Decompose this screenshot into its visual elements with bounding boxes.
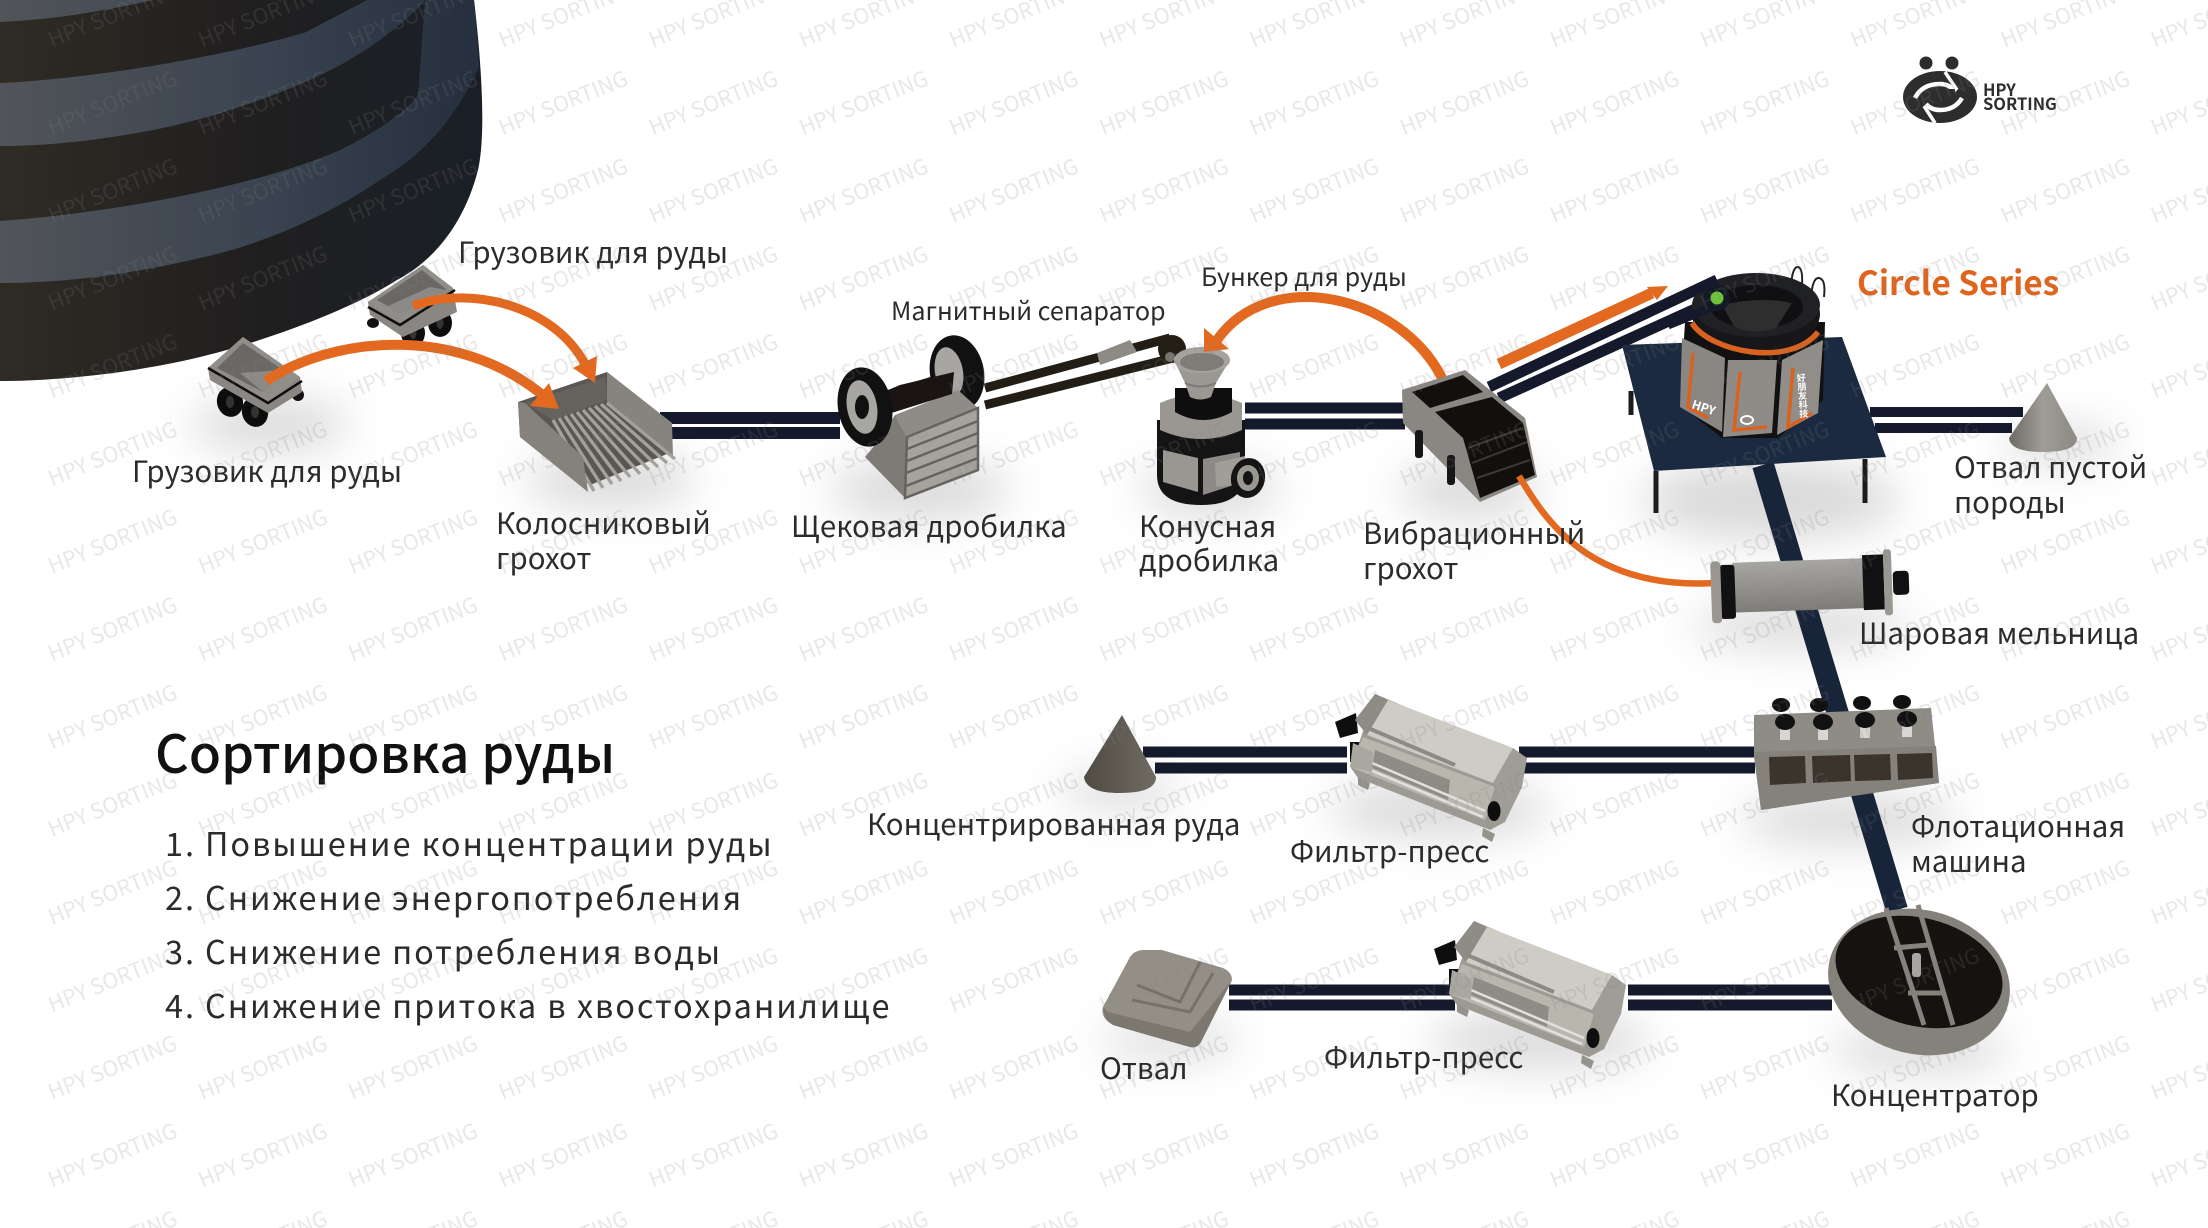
- Circle Series sorter: [1660, 267, 1825, 438]
- waste rock cone: [2009, 383, 2077, 452]
- benefits list: 2. Снижение энергопотребления: [165, 873, 743, 920]
- benefits list: [165, 819, 891, 1028]
- grizzly screen: [518, 372, 675, 492]
- arrow: feed to Circle Series: [1499, 286, 1668, 364]
- label: thickener: Концентратор: [1831, 1073, 2039, 1115]
- benefits list: 4. Снижение притока в хвостохранилище: [165, 981, 891, 1028]
- truck upper: [367, 265, 457, 347]
- label: vibrating screen: Вибрационный: [1363, 511, 1585, 553]
- cone crusher: [1157, 347, 1269, 505]
- Circle Series sorter: 科: [1798, 398, 1808, 411]
- logo: HPY: [1983, 77, 2016, 101]
- ball mill: [1710, 549, 1910, 623]
- label: grizzly screen: Колосниковый: [496, 501, 711, 543]
- conveyors: [660, 280, 2023, 1005]
- tailings pile: [1102, 950, 1232, 1047]
- label: truck lower: Грузовик для руды: [132, 449, 402, 491]
- benefits list: 3. Снижение потребления воды: [165, 927, 722, 974]
- Circle Series sorter: 友: [1798, 389, 1807, 402]
- vibrating screen: [1402, 370, 1537, 502]
- platform: [1622, 337, 1886, 513]
- label: ore bunker: Бункер для руды: [1201, 258, 1407, 294]
- label: magnetic separator: Магнитный сепаратор: [891, 292, 1166, 328]
- label: jaw crusher: Щековая дробилка: [791, 504, 1067, 546]
- label: vibrating screen: грохот: [1363, 546, 1458, 588]
- label: cone crusher: дробилка: [1139, 538, 1279, 580]
- label: waste rock: породы: [1954, 480, 2066, 522]
- arrow: trucks to screen: [266, 298, 597, 409]
- arrow: screen to ball mill: [1519, 476, 1726, 592]
- label: cone crusher: Конусная: [1139, 504, 1276, 546]
- Circle Series sorter: 好: [1796, 371, 1806, 384]
- heading: Circle Series: Circle Series: [1857, 256, 2059, 305]
- label: concentrate: Концентрированная руда: [867, 802, 1240, 844]
- logo: [1903, 56, 2057, 123]
- soft floor shadows: [190, 399, 2120, 1072]
- ore mound: [0, 0, 482, 381]
- thickener: [1812, 890, 2026, 1074]
- truck lower: [208, 337, 304, 430]
- Circle Series sorter: 技: [1799, 407, 1809, 420]
- Circle Series sorter: 朋: [1797, 380, 1807, 393]
- arrow: screen to bunker: [1204, 297, 1442, 378]
- filter press upper: [1335, 694, 1527, 842]
- label: flotation machine: машина: [1911, 839, 2027, 881]
- title: Сортировка руды: [155, 713, 615, 789]
- flotation machine: [1754, 695, 1939, 810]
- label: filter press lower: Фильтр-пресс: [1324, 1035, 1523, 1077]
- label: ball mill: Шаровая мельница: [1859, 611, 2139, 653]
- concentrate cone: [1084, 715, 1156, 793]
- label: flotation machine: Флотационная: [1911, 804, 2125, 846]
- label: waste rock: Отвал пустой: [1954, 445, 2147, 487]
- label: tailings: Отвал: [1100, 1046, 1188, 1088]
- label: truck upper: Грузовик для руды: [458, 230, 728, 272]
- label: grizzly screen: грохот: [496, 536, 591, 578]
- label: filter press upper: Фильтр-пресс: [1290, 829, 1489, 871]
- jaw crusher: [831, 331, 990, 498]
- filter press lower: [1434, 921, 1626, 1069]
- magnetic separator belt: [985, 335, 1186, 405]
- Circle Series sorter: HPY: [1690, 396, 1719, 420]
- benefits list: 1. Повышение концентрации руды: [165, 819, 774, 866]
- logo: SORTING: [1983, 91, 2057, 115]
